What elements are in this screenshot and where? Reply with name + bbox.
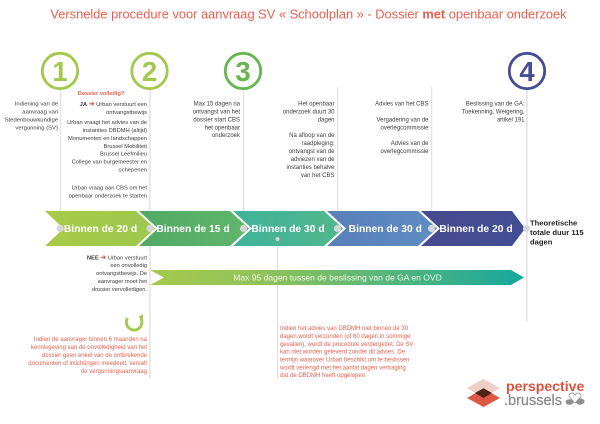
text: step 2 complete file: Brussel Mobiliteit: [104, 144, 147, 150]
step 2 badge: 2: [142, 56, 157, 87]
red note: DBDMH advice: wordt verlengd met het aantal dagen vertraging: [279, 366, 406, 372]
step 2 badge: [132, 53, 167, 89]
text: advice: overlegcommissie: [380, 149, 429, 155]
text: step 2 complete file: ontvangstbewijs: [106, 110, 147, 116]
text: public inquiry: adviezen van de: [291, 157, 335, 163]
step 4 badge: 4: [519, 56, 535, 87]
text: decision: [462, 102, 525, 124]
text: decision: artikel 191: [497, 118, 525, 124]
text: advice: [375, 102, 429, 155]
text: step 3: dossier start CBS: [193, 118, 240, 124]
step 3 badge: [225, 53, 261, 89]
text: public inquiry: Het openbaar: [298, 102, 334, 108]
text: step 3: ontvangst van het: [193, 110, 240, 116]
red note: DBDMH advice: gevallen), wordt de procedure verdergezet. De SV: [280, 342, 413, 348]
red note: DBDMH advice: [279, 326, 413, 379]
text: incomplete file: [87, 254, 147, 293]
text: step 2 complete file: Urban vraagt het advies van de: [67, 120, 147, 126]
chevron timeline: [45, 211, 525, 246]
text: incomplete file: dossier vervolledigen.: [92, 287, 147, 293]
chevron: 20 days second: [421, 211, 525, 246]
text: step 2 complete file: Urban vraag aan CBS om het: [72, 186, 147, 192]
red note: DBDMH advice: kan niet worden geleverd zonder dit advies. De: [280, 350, 406, 356]
text: public inquiry: van het CBS: [301, 173, 334, 179]
chevron: 20 days: Binnen de 20 d: [64, 224, 137, 235]
chevron: 20 days: [45, 211, 155, 246]
text: step 2 complete file: JA ➔ Urban verstuurt een: [80, 101, 147, 108]
total duration: totale duur 115: [530, 228, 584, 237]
text: step 2 complete file: [67, 91, 147, 200]
text: incomplete file: NEE ➔ Urban verstuurt: [87, 254, 147, 262]
chevron: 15 days: [139, 211, 249, 246]
chevron: 30 days second: Binnen de 30 d: [349, 224, 422, 235]
chevron: 20 days second: Binnen de 20 d: [439, 224, 513, 235]
step 3 badge: 3: [235, 56, 251, 87]
red note: lapse of application: documenten of inlichtingen meedeelt, vervalt: [28, 361, 147, 367]
text: step 1 submission: Indiening van de: [15, 102, 59, 108]
text: incomplete file: een onvolledig: [110, 263, 147, 269]
text: step 2 complete file: instanties DBDMH (altijd): [83, 128, 147, 134]
text: advice: Advies van de: [391, 141, 429, 147]
text: step 2 complete file: Brussel Leefmilieu: [100, 152, 147, 158]
text: public inquiry: instanties behalve: [286, 165, 335, 171]
chevron: 30 days: [233, 211, 343, 246]
text: advice: overlegcommissie: [380, 126, 429, 132]
red note: lapse of application: [28, 337, 148, 375]
arrow bar: 95 days: Max 95 dagen tussen de beslissing van de GA en OVD: [233, 272, 442, 282]
text: step 2 complete file: College van burgemeester en: [72, 160, 147, 166]
text: step 1 submission: [5, 102, 59, 132]
text: step 2 complete file: Monumenten en landschappen: [68, 136, 147, 142]
title: Versnelde procedure voor aanvraag SV « Schoolplan » - Dossier met openbaar onderzoek: [50, 6, 567, 22]
total duration: Theoretische: [530, 218, 577, 228]
total duration: dagen: [530, 238, 553, 246]
logo: perspective.brussels: perspective: [506, 378, 585, 394]
timeline dots: [57, 225, 530, 241]
text: public inquiry: onderzoek duurt 30: [283, 110, 335, 116]
red note: lapse of application: Indien de aanvrager binnen 6 maanden na: [34, 337, 148, 343]
chevron: 15 days: Binnen de 15 d: [156, 224, 230, 235]
total duration: [530, 218, 584, 246]
text: step 2 complete file: openbaar onderzoek te starten: [69, 194, 147, 200]
red note: lapse of application: dossier geen enkel van de ontbrekende: [42, 353, 148, 359]
text: step 1 submission: Stedenbouwkundige: [5, 118, 59, 124]
red note: DBDMH advice: termijn waarover Urban beschikt om te beslissen: [280, 358, 409, 364]
red note: lapse of application: kennisgeving van de onvolledigheid van het: [31, 345, 147, 351]
arrow bar: 95 days: [150, 270, 524, 285]
icon: loop arrow: [126, 314, 143, 330]
text: decision: Toekenning, Weigering,: [462, 110, 525, 116]
logo: perspective.brussels: [467, 378, 585, 409]
step 1 badge: [42, 53, 78, 89]
red note: lapse of application: de vergunningsaanvraag: [81, 369, 147, 375]
logo: perspective.brussels: .brussels: [504, 393, 562, 409]
red note: DBDMH advice: dat de DBDMH heeft opgelopen: [280, 373, 365, 379]
step 1 badge: 1: [52, 56, 68, 87]
text: public inquiry: Na afloop van de: [289, 133, 335, 139]
chevron: 30 days: Binnen de 30 d: [251, 224, 325, 235]
text: step 3: het openbaar: [205, 126, 240, 132]
text: step 2 complete file: schepenen: [119, 168, 147, 174]
text: public inquiry: dagen: [318, 118, 334, 124]
text: advice: Advies van het CBS: [375, 102, 428, 108]
text: incomplete file: aanvrager moet het: [98, 279, 147, 285]
step 4 badge: [509, 53, 545, 89]
text: incomplete file: ontvangstbewijs. De: [96, 271, 147, 277]
timeline guide lines: [60, 87, 528, 379]
chevron: 30 days second: [327, 211, 437, 246]
text: step 1 submission: aanvraag van: [22, 110, 58, 116]
text: step 3: [193, 102, 241, 139]
red note: DBDMH advice: dagen wordt verzonden (of 60 dagen in sommige: [280, 334, 411, 340]
text: public inquiry: ontvangst van de: [289, 149, 335, 155]
text: step 2 complete file: Dossier volledig?: [78, 91, 125, 97]
text: decision: Beslissing van de GA:: [466, 102, 525, 108]
text: advice: Vergadering van de: [376, 118, 429, 124]
text: public inquiry: [283, 102, 335, 179]
red note: DBDMH advice: Indien het advies van DBDMH niet binnen de 30: [280, 326, 409, 332]
text: step 1 submission: vergunning (SV): [15, 126, 58, 132]
text: public inquiry: raadpleging:: [301, 141, 335, 147]
text: step 3: Max 15 dagen na: [194, 102, 241, 108]
text: step 3: onderzoek: [212, 133, 241, 139]
